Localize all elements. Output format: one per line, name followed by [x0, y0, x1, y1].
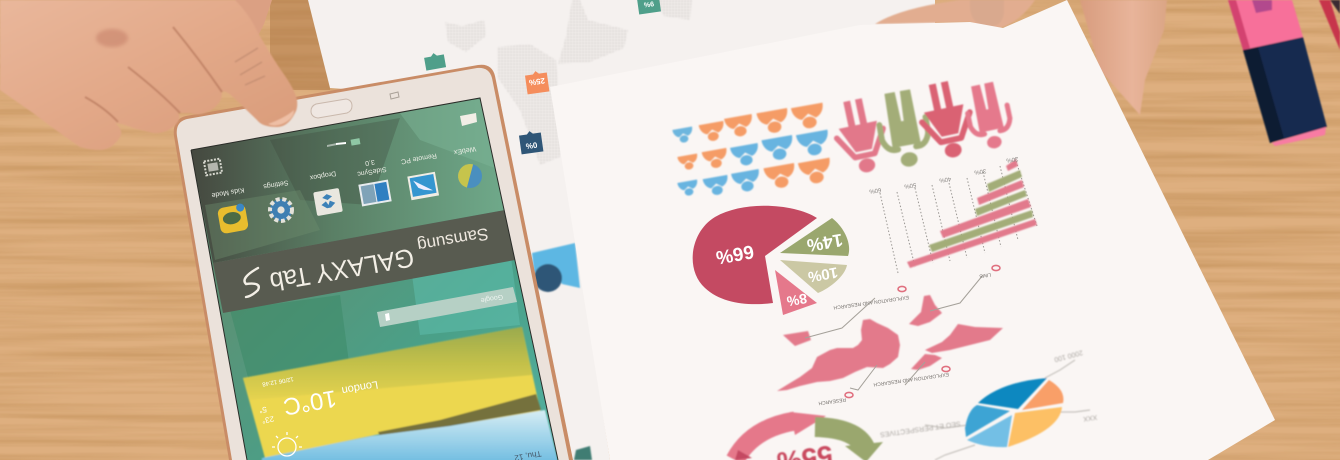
pie labels [714, 230, 844, 310]
axis labels: 50% [903, 181, 917, 189]
back key icon [390, 92, 399, 99]
sun icon [272, 432, 302, 456]
banner: Samsung GALAXY Tab: GALAXY Tab [267, 242, 416, 297]
app labels: SideSync [356, 165, 387, 177]
callout lines [805, 275, 983, 390]
weather text [258, 375, 542, 460]
slice: 8 percent [775, 270, 817, 315]
app labels [211, 145, 476, 198]
tag: 0 percent navy marker [519, 130, 543, 154]
dotted gridlines [880, 158, 1037, 273]
pie chart: blue, orange and yellow slices [879, 348, 1098, 460]
search bar [377, 287, 517, 327]
icon: Remote PC [407, 172, 439, 200]
axis labels: 60% [868, 186, 882, 194]
tag: green percent marker left [424, 51, 446, 71]
left hand on tablet edge [0, 0, 297, 150]
dotted grey world map [445, 0, 692, 165]
tag: 25 percent orange marker [525, 70, 549, 94]
small teal item near the bottom [574, 446, 592, 460]
knuckle shadow [96, 29, 128, 47]
app labels: Settings [262, 178, 289, 190]
back finger [235, 0, 272, 36]
highlighter pen [1228, 0, 1327, 146]
second red pen at the corner [1319, 0, 1340, 50]
icon: WebEx globe [458, 164, 482, 188]
tag: 25 percent orange marker: 25% [528, 76, 545, 87]
app labels: WebEx [453, 145, 476, 156]
weather text: 12/06 12:48 [261, 375, 294, 387]
app labels: 3.0 [364, 158, 375, 166]
icon: SideSync [358, 180, 392, 206]
axis labels: 40% [938, 175, 952, 183]
search bar: Google [480, 293, 504, 303]
weather text: 5° [258, 405, 267, 415]
small orange and blue people [672, 103, 833, 197]
pie labels: 10% [807, 263, 839, 285]
axis labels: 20% [1005, 155, 1019, 163]
knuckle creases [235, 48, 265, 85]
status square [460, 113, 477, 126]
chart labels: 2000 100 [1053, 348, 1083, 363]
axis labels [868, 155, 1019, 194]
slice: 14 percent [780, 218, 849, 256]
screen [192, 98, 558, 460]
tablet [174, 65, 580, 460]
thumb [875, 0, 1035, 28]
chart labels: XXX [1082, 413, 1098, 422]
app labels: Kids Mode [211, 186, 245, 198]
slice: 10 percent [780, 260, 847, 293]
icon: Settings gear [270, 199, 292, 221]
icon: Dropbox [313, 188, 343, 216]
callout markers [845, 265, 1000, 398]
tag: top green marker [637, 0, 661, 14]
axis labels: 30% [973, 167, 987, 175]
swoosh logo [244, 268, 259, 297]
pie labels: 8% [785, 290, 808, 310]
icon: Kids Mode [217, 203, 249, 234]
page indicator [327, 138, 360, 147]
app labels: Dropbox [309, 169, 336, 181]
circular arrow with 55 percent label [735, 412, 883, 460]
callout labels: RESEARCH [818, 396, 846, 406]
chart labels [879, 348, 1098, 438]
chart labels: SEO ET PERSPECTIVES [879, 419, 961, 438]
tag: 0 percent navy marker: 0% [525, 140, 538, 151]
pie labels: 14% [805, 230, 844, 256]
weather text: London [341, 378, 379, 396]
weather text: 23° [261, 414, 275, 425]
pie labels: 66% [714, 240, 755, 268]
thumbnail [268, 110, 294, 126]
home button [311, 99, 352, 118]
finger creases [85, 27, 222, 122]
callout lines [925, 360, 1090, 460]
apps grid icon [204, 159, 222, 175]
large pictogram people [830, 78, 1015, 177]
callout labels [818, 271, 991, 406]
wallpaper facets [205, 100, 500, 260]
main hand [0, 0, 297, 150]
banner: Samsung GALAXY Tab: Samsung [416, 224, 490, 255]
callout labels: EXPLORATION AND RESEARCH [873, 371, 949, 387]
callout labels: LIMS [978, 271, 991, 279]
front paper [550, 0, 1275, 460]
app labels: Remote PC [400, 151, 437, 165]
horizontal bar chart, upside down [868, 155, 1037, 273]
blue shape chart on back paper [532, 243, 580, 292]
weather widget photo [243, 327, 560, 460]
banner: Samsung GALAXY Tab [213, 210, 515, 313]
right hand holding the papers [875, 0, 1167, 115]
pie chart: 66, 14, 10 and 8 percent [693, 206, 849, 315]
tablet body [174, 65, 573, 460]
back paper with dotted world map [308, 0, 935, 460]
pictogram rows [672, 78, 1015, 197]
callout labels: EXPLORATION AND RESEARCH [833, 294, 909, 310]
screen border line [191, 98, 558, 460]
weather text: 10°C [281, 384, 339, 420]
bars [907, 159, 1037, 268]
slice: 66 percent [693, 206, 817, 304]
world map with callouts, upside down [777, 265, 1003, 406]
map landmasses [777, 295, 1003, 391]
